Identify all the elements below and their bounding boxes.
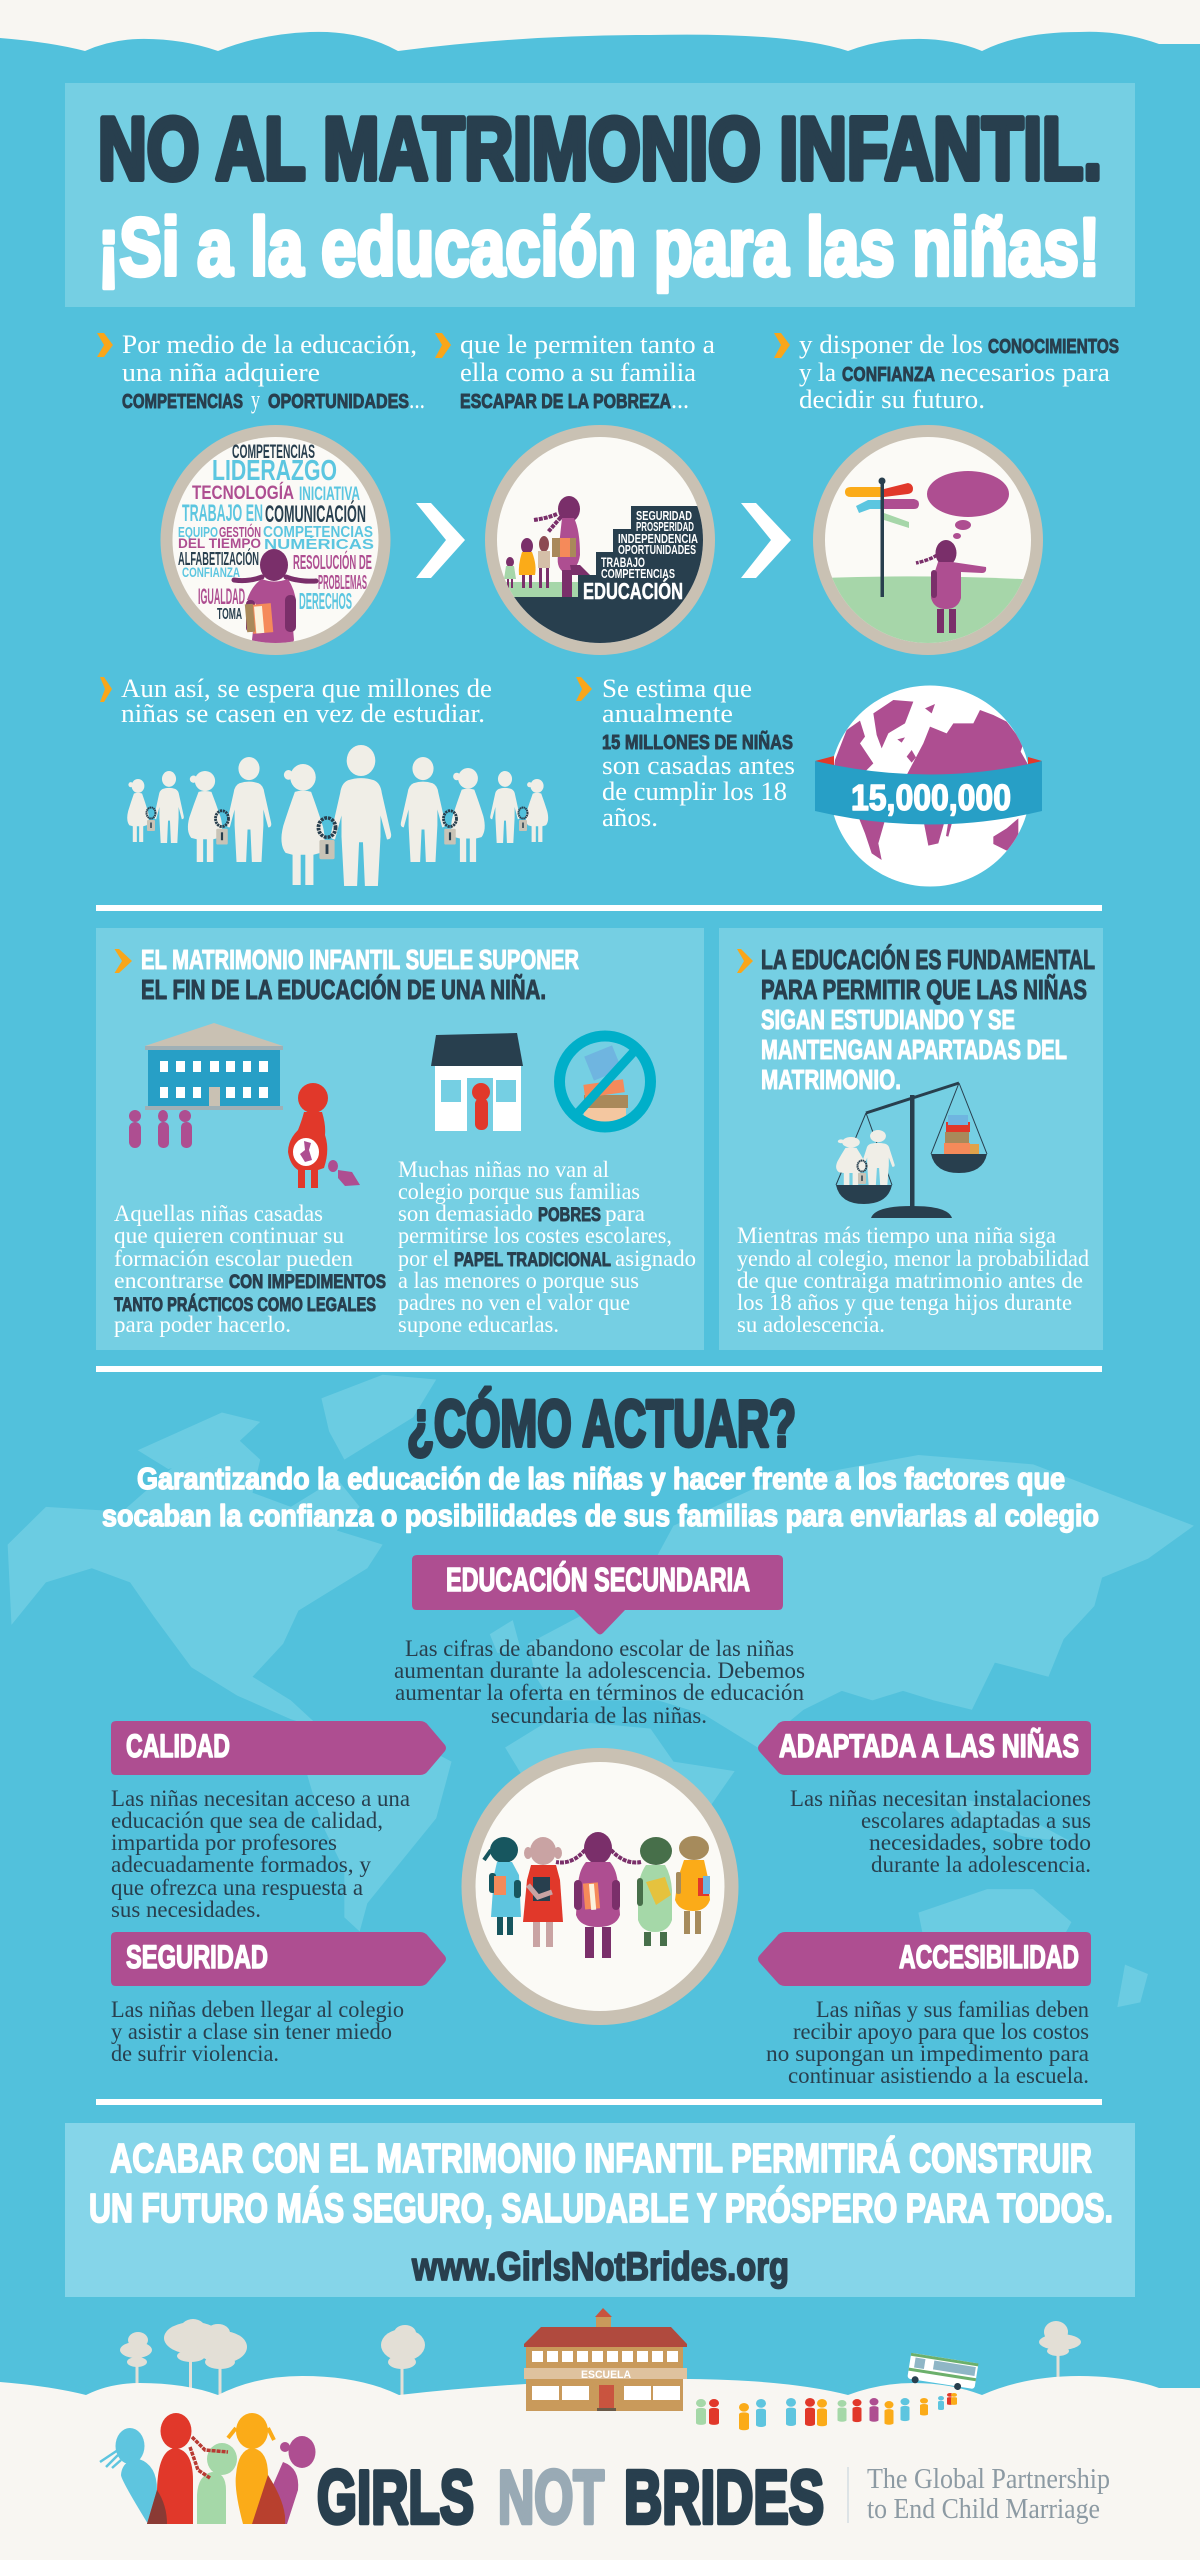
text: Mientras más tiempo una niña siga	[737, 1223, 1056, 1248]
text: middle: a las menores o porque sus	[398, 1268, 639, 1293]
text: su adolescencia.	[737, 1312, 885, 1337]
text: millones de niñas: Aun así, se espera que millones de	[121, 674, 492, 703]
text: adaptada: Las niñas necesitan instalaciones	[790, 1786, 1091, 1811]
text: middle: asignado	[615, 1246, 696, 1271]
icon: three purple girls	[129, 1110, 192, 1148]
girl 1	[484, 1837, 521, 1935]
girl 4	[637, 1837, 672, 1946]
icon: school building: ESCUELA	[581, 2369, 631, 2381]
circle: word cloud of skills: RESOLUCIÓN DE	[293, 550, 372, 574]
heading: PARA PERMITIR QUE LAS NIÑAS	[761, 974, 1087, 1005]
circle: stairs of education: PROSPERIDAD	[636, 519, 694, 534]
text: left: formación escolar pueden	[114, 1246, 353, 1271]
circle: word cloud of skills: TOMA	[217, 606, 242, 623]
text: left: encontrarse	[114, 1268, 224, 1293]
heading: EL FIN DE LA EDUCACIÓN DE UNA NIÑA.	[141, 974, 546, 1005]
heading	[114, 944, 579, 1005]
text: adaptada	[790, 1786, 1091, 1877]
panel: closing message	[65, 2123, 1135, 2297]
text: 15 millones: años.	[602, 803, 658, 832]
text: left: para poder hacerlo.	[114, 1312, 291, 1337]
tagline: to End Child Marriage	[867, 2493, 1100, 2525]
girl 2	[523, 1837, 563, 1947]
arrow chevron 2	[741, 503, 791, 578]
text: middle: permitirse los costes escolares,	[398, 1223, 672, 1248]
circle: word cloud of skills: GESTIÓN	[219, 523, 261, 541]
circle: word cloud of skills: TRABAJO EN	[182, 500, 263, 527]
icon: bus	[907, 2353, 978, 2393]
intro text 1: Por medio de la educación,	[122, 330, 417, 359]
text: secondary education: aumentan durante la adolescencia. Debemos	[394, 1658, 805, 1683]
icon: balance scale	[836, 1083, 987, 1218]
circle: stairs of education: COMPETENCIAS	[601, 566, 675, 581]
tag: calidad: CALIDAD	[126, 1728, 230, 1764]
intro text 1	[97, 330, 425, 414]
top cream wavy edge	[0, 0, 1200, 51]
text: accesibilidad: recibir apoyo para que los costos	[793, 2019, 1089, 2044]
circle: signpost and thought bubble	[813, 425, 1043, 655]
tag: seguridad: SEGURIDAD	[126, 1939, 268, 1975]
subheading: Garantizando la educación de las niñas y hacer frente a los factores que	[137, 1461, 1065, 1496]
text: calidad: sus necesidades.	[111, 1897, 261, 1922]
callout: educacion secundaria	[412, 1555, 783, 1634]
subheading	[102, 1461, 1099, 1533]
circle: stairs of education: INDEPENDENCIA	[618, 531, 698, 546]
icon: signpost	[845, 478, 919, 597]
icon: no books sign	[560, 1036, 650, 1127]
circle: word cloud of skills: PROBLEMAS	[318, 572, 367, 594]
girl 3	[556, 1832, 641, 1958]
heading: MANTENGAN APARTADAS DEL	[761, 1034, 1067, 1065]
intro text 3: CONFIANZA	[842, 364, 935, 386]
text: secondary education	[394, 1636, 805, 1728]
icon: children on stairs	[504, 496, 590, 597]
heading: EL MATRIMONIO INFANTIL SUELE SUPONER	[141, 944, 579, 975]
circle: stairs of education: SEGURIDAD	[636, 508, 692, 523]
tag: seguridad	[111, 1932, 446, 1986]
circle: stairs of education: TRABAJO	[601, 554, 645, 570]
text: accesibilidad: Las niñas y sus familias deben	[816, 1997, 1089, 2022]
text: seguridad: de sufrir violencia.	[111, 2041, 279, 2066]
text: calidad: que ofrezca una respuesta a	[111, 1875, 363, 1900]
tag: accesibilidad	[758, 1932, 1091, 1986]
world map background	[8, 1375, 1194, 2007]
text: millones de niñas: niñas se casen en vez de estudiar.	[121, 699, 485, 728]
circle: word cloud of skills: COMPETENCIAS	[232, 442, 315, 463]
text: calidad: Las niñas necesitan acceso a una	[111, 1786, 410, 1811]
text: 15 millones: Se estima que	[602, 674, 752, 703]
text: secondary education: Las cifras de abandono escolar de las niñas	[405, 1636, 794, 1661]
heading	[737, 944, 1095, 1095]
text: calidad: adecuadamente formados, y	[111, 1852, 372, 1877]
text: accesibilidad: continuar asistiendo a la escuela.	[788, 2063, 1089, 2088]
intro text 1: COMPETENCIAS	[122, 391, 243, 413]
intro text 1: ...	[409, 385, 425, 414]
circle: word cloud of skills: TECNOLOGÍA	[192, 482, 294, 504]
circle: stairs of education: EDUCACIÓN	[583, 577, 683, 604]
website: www.GirlsNotBrides.org	[411, 2245, 789, 2289]
circle: word cloud of skills: ALFABETIZACIÓN	[178, 548, 259, 569]
text: middle: Muchas niñas no van al	[398, 1157, 609, 1182]
text: 15 millones: anualmente	[602, 699, 733, 728]
circle: word cloud of skills: COMUNICACIÓN	[265, 500, 366, 528]
circle: word cloud of skills: IGUALDAD	[198, 584, 245, 609]
circle: five girls with books	[462, 1748, 738, 2025]
tagline: The Global Partnership	[867, 2463, 1110, 2495]
intro text 1: y	[251, 385, 260, 414]
text: adaptada: escolares adaptadas a sus	[861, 1808, 1091, 1833]
text: middle	[398, 1157, 696, 1337]
text: left: CON IMPEDIMENTOS	[229, 1272, 386, 1293]
text: seguridad	[111, 1997, 404, 2066]
divider	[96, 2099, 1102, 2105]
callout: educacion secundaria: EDUCACIÓN SECUNDARIA	[446, 1561, 750, 1598]
text: secondary education: secundaria de las niñas.	[491, 1703, 707, 1728]
tag: accesibilidad: ACCESIBILIDAD	[899, 1939, 1079, 1975]
circle: word cloud of skills: EQUIPO	[178, 524, 218, 541]
ground	[0, 2376, 1200, 2560]
text: middle: PAPEL TRADICIONAL	[454, 1250, 611, 1271]
heading: SIGAN ESTUDIANDO Y SE	[761, 1004, 1015, 1035]
circle: word cloud of skills: LIDERAZGO	[212, 455, 337, 487]
heading: como actuar: ¿CÓMO ACTUAR?	[407, 1386, 796, 1460]
icon: line of small girls	[696, 2393, 957, 2430]
text: middle: colegio porque sus familias	[398, 1179, 640, 1204]
intro text 2	[435, 330, 715, 414]
icon: girl with books	[234, 549, 316, 650]
circle: word cloud of skills: COMPETENCIAS	[263, 524, 373, 541]
tagline	[867, 2463, 1110, 2525]
text: left	[114, 1201, 386, 1337]
intro text 2: ella como a su familia	[460, 358, 696, 387]
text: calidad: educación que sea de calidad,	[111, 1808, 383, 1833]
circle: word cloud of skills: CONFIANZA	[182, 564, 240, 580]
text: adaptada: necesidades, sobre todo	[869, 1830, 1091, 1855]
intro text 3: necesarios para	[940, 358, 1110, 387]
text: 15 millones: 15 MILLONES DE NIÑAS	[602, 731, 793, 754]
icon: globe with 15,000,000 banner	[815, 686, 1042, 886]
text: middle: son demasiado	[398, 1201, 533, 1226]
intro text 1: una niña adquiere	[122, 358, 320, 387]
intro text 2: ESCAPAR DE LA POBREZA	[460, 391, 671, 413]
text: de que contraiga matrimonio antes de	[737, 1268, 1083, 1293]
text: left: TANTO PRÁCTICOS COMO LEGALES	[114, 1294, 376, 1316]
text: middle: por el	[398, 1246, 449, 1271]
circle: word cloud of skills	[160, 425, 390, 655]
logo wordmark	[317, 2455, 824, 2539]
intro text 3: CONOCIMIENTOS	[988, 336, 1119, 358]
text: middle: supone educarlas.	[398, 1312, 559, 1337]
icon: school building	[145, 1023, 283, 1110]
circle: stairs of education	[485, 425, 715, 655]
text: middle: para	[605, 1201, 645, 1226]
intro text 2: ...	[671, 385, 689, 414]
text: middle: POBRES	[538, 1205, 601, 1226]
circle: word cloud of skills: DEL TIEMPO	[178, 535, 261, 551]
title panel	[65, 83, 1135, 307]
text: yendo al colegio, menor la probabilidad	[737, 1246, 1089, 1271]
panel: education ends with marriage	[96, 928, 704, 1350]
text: 15 millones: de cumplir los 18	[602, 777, 787, 806]
circle: word cloud of skills: DERECHOS	[299, 588, 352, 614]
intro text 3: decidir su futuro.	[799, 385, 985, 414]
icon: pregnant girl and toddler	[288, 1083, 360, 1188]
text	[737, 1223, 1089, 1337]
girl 5	[675, 1836, 710, 1934]
intro text 3	[774, 330, 1119, 414]
logo figures	[100, 2413, 316, 2524]
intro text 3: y disponer de los	[799, 330, 983, 359]
text: 15 millones	[576, 674, 795, 832]
icon: school building	[524, 2308, 687, 2411]
text: secondary education: aumentar la oferta en términos de educación	[395, 1680, 804, 1705]
intro text 3: y la	[799, 358, 836, 387]
logo wordmark: GIRLS	[317, 2455, 474, 2539]
text: los 18 años y que tenga hijos durante	[737, 1290, 1072, 1315]
text: middle: padres no ven el valor que	[398, 1290, 630, 1315]
icon: globe with 15,000,000 banner: 15,000,000	[851, 777, 1011, 818]
icon: row of married girls and men	[127, 745, 548, 886]
logo wordmark: BRIDES	[624, 2455, 824, 2539]
intro text 2: que le permiten tanto a	[460, 330, 715, 359]
tag: adaptada a las ninas: ADAPTADA A LAS NIÑAS	[779, 1728, 1079, 1764]
heading: MATRIMONIO.	[761, 1064, 901, 1095]
text: left: que quieren continuar su	[114, 1223, 345, 1248]
panel: education is fundamental	[719, 928, 1103, 1350]
text: calidad	[111, 1786, 410, 1922]
icon: girl looking	[916, 540, 986, 633]
divider	[96, 905, 1102, 911]
circle: word cloud of skills: INICIATIVA	[299, 484, 360, 505]
tag: calidad	[111, 1721, 446, 1775]
divider	[96, 1366, 1102, 1372]
intro text 1: OPORTUNIDADES	[268, 391, 409, 413]
text: accesibilidad: no supongan un impedimento para	[766, 2041, 1089, 2066]
circle: stairs of education: OPORTUNIDADES	[618, 542, 696, 557]
text: accesibilidad	[766, 1997, 1089, 2088]
icon: thought bubble	[927, 471, 1009, 539]
text: adaptada: durante la adolescencia.	[871, 1852, 1091, 1877]
logo wordmark: NOT	[498, 2455, 604, 2539]
text: left: Aquellas niñas casadas	[114, 1201, 323, 1226]
icon: house with girl	[431, 1033, 523, 1131]
tag: adaptada a las ninas	[758, 1721, 1091, 1775]
trees	[120, 2319, 1081, 2397]
text: seguridad: y asistir a clase sin tener miedo	[111, 2019, 392, 2044]
arrow chevron 1	[416, 503, 465, 578]
text: calidad: impartida por profesores	[111, 1830, 337, 1855]
text: seguridad: Las niñas deben llegar al colegio	[111, 1997, 404, 2022]
text: millones de niñas	[100, 674, 492, 728]
circle: word cloud of skills: NUMÉRICAS	[264, 536, 374, 553]
text: 15 millones: son casadas antes	[602, 751, 795, 780]
